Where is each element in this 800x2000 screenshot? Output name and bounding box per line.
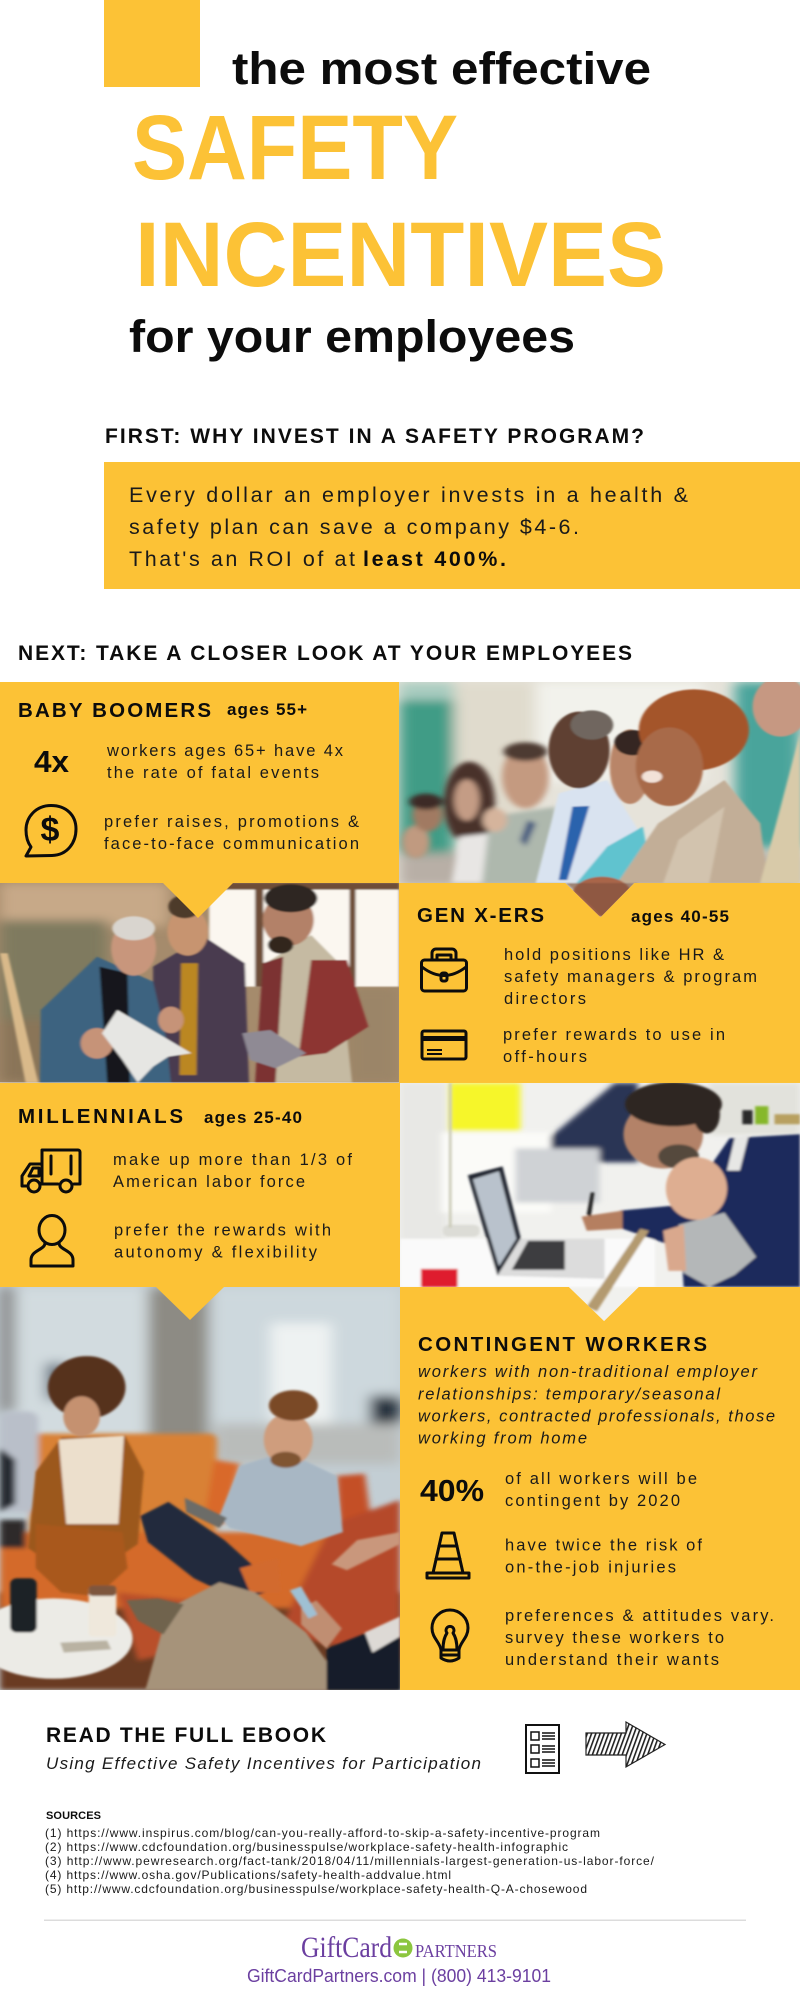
source list: (2) https://www.cdcfoundation.org/businesspulse/workplace-safety-health-infographic xyxy=(45,1840,568,1854)
fact: autonomy xyxy=(114,1222,331,1262)
fact: autonomy: autonomy & flexibility xyxy=(114,1244,318,1262)
panel: ROI callout xyxy=(104,462,800,589)
fact: contingent by 2020: of all workers will be xyxy=(505,1470,697,1488)
icon: credit card xyxy=(422,1031,466,1059)
fact: preferences: prefer raises, promotions & xyxy=(104,813,359,831)
contact line: GiftCardPartners.com | (800) 413-9101 xyxy=(247,1966,551,1986)
photo: smiling conference audience xyxy=(399,677,800,922)
arrow: hatched xyxy=(586,1722,665,1767)
heading: first: FIRST: WHY INVEST IN A SAFETY PROGRAM? xyxy=(105,425,644,448)
photo: workshop colleagues xyxy=(0,883,399,1083)
icon: truck xyxy=(22,1150,80,1192)
fact: labor force: make up more than 1/3 of xyxy=(113,1151,352,1169)
photo: couch meeting with tablets xyxy=(0,1287,400,1690)
source list: (3) http://www.pewresearch.org/fact-tank/2018/04/11/millennials-largest-generation-us-labor-force/ xyxy=(45,1854,655,1868)
heading: Gen X-ers: GEN X-ERS xyxy=(417,904,544,927)
logo: GiftCard Partners: GiftCard xyxy=(301,1931,392,1964)
description: relationships: temporary/seasonal xyxy=(418,1386,721,1404)
icon: dollar speech bubble xyxy=(26,806,76,856)
stat: 4x: 4x xyxy=(34,744,70,779)
description: workers with non-traditional employer xyxy=(418,1363,758,1381)
sources xyxy=(45,1810,655,1896)
call to action: read the full ebook xyxy=(46,1722,665,1773)
title line: the most effective: the most effective xyxy=(232,43,651,94)
panel: Gen X-ers xyxy=(399,883,800,1083)
fact: labor force xyxy=(113,1151,352,1191)
fact: preferences: face-to-face communication xyxy=(104,835,359,853)
fact: positions: hold positions like HR & xyxy=(504,946,724,964)
panel: Baby Boomers xyxy=(0,682,399,918)
icon: briefcase xyxy=(422,949,466,991)
logo: GiftCard Partners xyxy=(301,1931,497,1964)
callout line 3: That's an ROI of at xyxy=(129,547,355,571)
fact: labor force: American labor force xyxy=(113,1173,305,1191)
panel: Millennials xyxy=(0,1083,400,1320)
fact: injuries: on-the-job injuries xyxy=(505,1558,676,1576)
fact: preferences vary: survey these workers to xyxy=(505,1629,724,1647)
fact: fatal events xyxy=(106,742,344,782)
title line: SAFETY: SAFETY xyxy=(132,97,458,199)
title xyxy=(129,43,666,362)
fact: fatal events: workers ages 65+ have 4x xyxy=(106,742,344,760)
decorative yellow square xyxy=(104,0,200,87)
icon: person xyxy=(31,1216,73,1266)
fact: positions: directors xyxy=(504,990,586,1008)
fact: injuries: have twice the risk of xyxy=(505,1536,702,1554)
source list: (1) https://www.inspirus.com/blog/can-you-really-afford-to-skip-a-safety-incentive-program xyxy=(45,1826,600,1840)
sources heading: SOURCES xyxy=(46,1810,101,1822)
age range: ages 25-40 xyxy=(204,1108,302,1127)
source list: (4) https://www.osha.gov/Publications/safety-health-addvalue.html xyxy=(45,1868,451,1882)
source list xyxy=(45,1826,655,1896)
callout line 1: Every dollar an employer invests in a health & xyxy=(129,483,688,507)
panel: Contingent Workers xyxy=(400,1287,800,1690)
age range: ages 40-55 xyxy=(631,907,729,926)
heading: READ THE FULL EBOOK xyxy=(46,1724,326,1747)
heading: next: NEXT: TAKE A CLOSER LOOK AT YOUR EMPLOYEES xyxy=(18,642,632,665)
fact: preferences vary: understand their wants xyxy=(505,1651,719,1669)
icon: light bulb xyxy=(432,1610,468,1661)
callout line 2: safety plan can save a company $4-6. xyxy=(129,515,579,539)
fact: contingent by 2020 xyxy=(505,1470,697,1510)
description xyxy=(418,1363,775,1448)
logo: GiftCard Partners: PARTNERS xyxy=(415,1941,497,1961)
stat: 40%: 40% xyxy=(420,1473,484,1508)
heading: Contingent Workers: CONTINGENT WORKERS xyxy=(418,1333,707,1356)
fact: fatal events: the rate of fatal events xyxy=(107,764,319,782)
icon: safety cone xyxy=(427,1533,469,1578)
fact: preferences xyxy=(104,813,359,853)
age range: ages 55+ xyxy=(227,700,307,719)
callout bold emphasis: least 400%. xyxy=(363,547,506,571)
description: workers, contracted professionals, those xyxy=(418,1408,775,1426)
fact: contingent by 2020: contingent by 2020 xyxy=(505,1492,680,1510)
ebook title: Using Effective Safety Incentives for Participation xyxy=(46,1754,481,1773)
fact: rewards: off-hours xyxy=(503,1048,587,1066)
icon: document xyxy=(526,1725,559,1773)
description: working from home xyxy=(418,1430,587,1448)
fact: rewards xyxy=(503,1026,725,1066)
heading: Baby Boomers: BABY BOOMERS xyxy=(18,699,211,722)
icon: dollar speech bubble: $ xyxy=(41,811,60,849)
photo: father with baby at laptop xyxy=(400,1082,800,1324)
fact: positions: safety managers & program xyxy=(504,968,757,986)
heading: Millennials: MILLENNIALS xyxy=(18,1105,183,1128)
fact: injuries xyxy=(505,1536,702,1576)
title line: INCENTIVES: INCENTIVES xyxy=(135,204,666,306)
title line: for your employees: for your employees xyxy=(129,311,575,362)
fact: preferences vary xyxy=(505,1607,774,1669)
fact: positions xyxy=(504,946,757,1008)
fact: preferences vary: preferences & attitudes vary. xyxy=(505,1607,774,1625)
fact: rewards: prefer rewards to use in xyxy=(503,1026,725,1044)
source list: (5) http://www.cdcfoundation.org/businesspulse/workplace-safety-health-Q-A-chosewood xyxy=(45,1882,587,1896)
fact: autonomy: prefer the rewards with xyxy=(114,1222,331,1240)
